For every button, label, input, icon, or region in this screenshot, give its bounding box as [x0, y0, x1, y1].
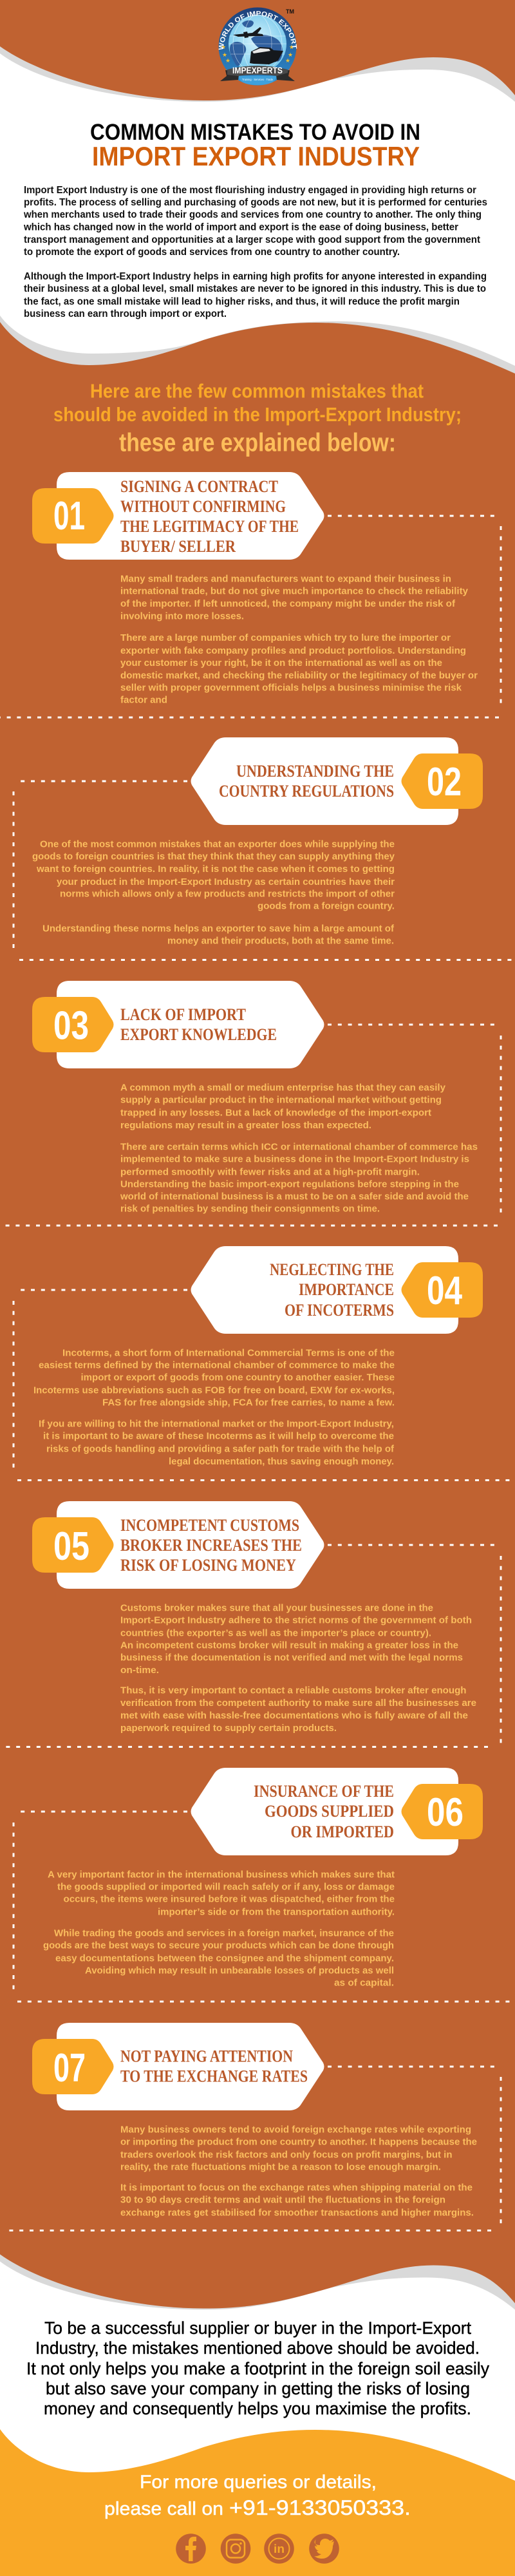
body 07: Many business owners tend to avoid foreign exchange rates while exporting: [120, 2124, 471, 2135]
closing statement: Industry, the mistakes mentioned above should be avoided.: [35, 2338, 480, 2358]
heading 07: TO THE EXCHANGE RATES: [120, 2067, 308, 2086]
icon: linkedin: in: [274, 2543, 285, 2555]
body 02: [32, 839, 395, 947]
body 02: goods from a foreign country.: [258, 901, 395, 912]
closing statement: It not only helps you make a footprint in the foreign soil easily: [26, 2359, 490, 2378]
body 06: as of capital.: [334, 1978, 394, 1989]
body 06: the goods supplied or imported will reach safely or if any, loss or damage: [57, 1882, 395, 1893]
body 07: exchange rates get stabilised for smoother transactions and higher margins.: [120, 2208, 474, 2218]
body 01: your customer is your right, be it on the international as well as on the: [120, 658, 442, 668]
body 03: regulations may result in a greater loss than expected.: [120, 1120, 371, 1131]
logo: World of Import Export: ★: [221, 44, 226, 50]
intro text: [23, 185, 487, 319]
tag shape 06: [191, 1768, 483, 1855]
body 06: A very important factor in the international business which makes sure that: [48, 1869, 395, 1880]
body 07: It is important to focus on the exchange rates when shipping material on the: [120, 2183, 473, 2193]
body 02: One of the most common mistakes that an exporter does while supplying the: [40, 839, 395, 850]
logo: World of Import Export: WORLD OF IMPORT EXPORT: [219, 11, 297, 50]
panel: mistake 03: [0, 981, 501, 1226]
heading 02: COUNTRY REGULATIONS: [219, 782, 394, 800]
body 01: involving into more losses.: [120, 611, 244, 622]
body 02: norms which allows only a few products and restricts the import of other: [60, 889, 395, 899]
body 07: traders overlook the risk factors and only focus on profit margins, but in: [120, 2149, 452, 2160]
intro text: their business at a global level, small mistakes are never to be ignored in this industry. This is due to: [24, 283, 486, 294]
heading 01: SIGNING A CONTRACT: [120, 477, 278, 496]
body 01: domestic market, and checking the reliability or the legitimacy of the buyer or: [120, 670, 478, 681]
intro text: profits. The process of selling and purchasing of goods are not new, but it is performed for centuries: [24, 197, 487, 208]
body 03: Understanding the basic import-export regulations before stepping in the: [120, 1179, 459, 1190]
body 06: occurs, the items were insured before it was dispatched, either from the: [63, 1894, 395, 1905]
logo: World of Import Export: TM: [286, 8, 294, 15]
icon: instagram: [221, 2533, 250, 2564]
number 06: 06: [427, 1790, 464, 1835]
body 04: Incoterms, a short form of International Commercial Terms is one of the: [62, 1347, 395, 1358]
tag shape 04: [191, 1246, 483, 1334]
number 01: 01: [53, 494, 85, 538]
panel: mistake 05: [0, 1501, 501, 1747]
number 07: 07: [53, 2046, 86, 2090]
body 03: risk of penalties by sending their consignments on time.: [120, 1203, 380, 1215]
body 05: Import-Export Industry adhere to the strict norms of the government of both: [120, 1615, 472, 1626]
section heading: should be avoided in the Import-Export Industry;: [53, 403, 462, 426]
icon: ship: [250, 47, 283, 64]
body 06: goods are the best ways to secure your products which can be done through: [43, 1940, 394, 1951]
contact text: please call on: [104, 2499, 223, 2519]
title: COMMON MISTAKES TO AVOID IN: [90, 120, 420, 145]
closing statement: but also save your company in getting the risks of losing: [46, 2379, 470, 2398]
logo: World of Import Export: IMPEXPERTS: [232, 66, 283, 75]
intro text: business can earn through import or export.: [24, 308, 227, 319]
main orange background with wave: [0, 316, 515, 2215]
intro text: Although the Import-Export Industry helps in earning high profits for anyone interested in expanding: [24, 271, 487, 282]
heading 06: GOODS SUPPLIED: [265, 1802, 394, 1821]
body 03: A common myth a small or medium enterprise has that they can easily: [120, 1083, 446, 1094]
body 05: met with ease with hassle-free documentations who is fully aware of all the: [120, 1710, 468, 1721]
tag shape 02: [191, 737, 483, 825]
heading 01: BUYER/ SELLER: [120, 537, 236, 556]
body 07: or importing the product from one country to another. It happens because the: [120, 2136, 477, 2147]
tag shape 07: [32, 2023, 324, 2110]
panel: mistake 01: [0, 472, 501, 717]
heading 02: [219, 762, 394, 800]
intro text: transport management and opportunities at a larger scope with good support from the government: [24, 234, 480, 245]
body 04: risks of goods handling and providing a safer path for trade with the help of: [46, 1444, 395, 1455]
body 01: international trade, but do not give much importance to check the reliability: [120, 586, 469, 597]
number 05: 05: [53, 1524, 89, 1569]
body 02: want to foreign countries. In reality, it is not the case when it comes to getting: [36, 864, 395, 875]
panel: mistake 07: [5, 2023, 501, 2231]
heading 06: OR IMPORTED: [291, 1823, 394, 1841]
intro text: which has changed now in the world of import and export is the ease of doing business, better: [23, 222, 458, 233]
tag shape 03: [32, 981, 324, 1068]
heading 03: [120, 1005, 277, 1044]
logo: World of Import Export: ★: [225, 57, 230, 64]
body 06: importer’s side or from the transportation authority.: [158, 1907, 395, 1918]
body 01: Many small traders and manufacturers want to expand their business in: [120, 573, 451, 585]
heading 02: UNDERSTANDING THE: [236, 762, 394, 781]
body 01: exporter with fake company profiles and product portfolios. Understanding: [120, 645, 466, 656]
body 04: legal documentation, thus saving enough money.: [169, 1456, 394, 1467]
number 03: 03: [53, 1003, 89, 1048]
body 05: paperwork required to supply certain products.: [120, 1723, 337, 1734]
heading 07: NOT PAYING ATTENTION: [120, 2047, 293, 2066]
panel: mistake 02: [14, 737, 515, 960]
body 05: Customs broker makes sure that all your businesses are done in the: [120, 1602, 433, 1613]
title: IMPORT EXPORT INDUSTRY: [92, 141, 420, 171]
body 04: easiest terms defined by the international chamber of commerce to make the: [39, 1360, 395, 1370]
body 04: import or export of goods from one country to another easier. These: [81, 1372, 395, 1383]
icon: airplane: [233, 27, 263, 38]
body 05: An incompetent customs broker will result in making a greater loss in the: [120, 1640, 458, 1651]
body 01: seller with proper government officials helps a business minimise the risk: [120, 683, 462, 694]
body 07: [120, 2124, 477, 2218]
body 07: reality, the rate fluctuations might be a reason to lose enough margin.: [120, 2162, 441, 2173]
contact text: +91-9133050333.: [229, 2496, 411, 2519]
body 02: goods to foreign countries is that they think that they can supply anything they: [32, 851, 395, 862]
body 04: If you are willing to hit the international market or the Import-Export Industry,: [39, 1419, 394, 1430]
body 03: performed smoothly with fewer risks and at a high-profit margin.: [120, 1167, 420, 1177]
heading 07: [120, 2047, 308, 2086]
heading 06: [254, 1782, 394, 1841]
body 06: easy documentations between the consignee and the shipment company.: [55, 1953, 394, 1964]
body 04: [33, 1347, 395, 1467]
contact text: [104, 2472, 411, 2519]
heading 05: [120, 1516, 302, 1575]
body 06: While trading the goods and services in a foreign market, insurance of the: [54, 1928, 394, 1939]
body 01: factor and: [120, 694, 167, 705]
heading 04: IMPORTANCE: [299, 1280, 394, 1299]
title: [90, 120, 420, 171]
body 05: on-time.: [120, 1665, 159, 1676]
body 02: your product in the Import-Export Industry as certain countries have their: [57, 876, 395, 887]
heading 05: RISK OF LOSING MONEY: [120, 1556, 296, 1575]
icon: linkedin: [264, 2533, 294, 2564]
closing statement: money and consequently helps you maximise the profits.: [44, 2399, 471, 2418]
section heading: Here are the few common mistakes that: [90, 380, 424, 402]
section heading: [53, 380, 462, 457]
heading 03: EXPORT KNOWLEDGE: [120, 1025, 277, 1044]
contact text: For more queries or details,: [140, 2472, 377, 2492]
heading 06: INSURANCE OF THE: [254, 1782, 394, 1801]
body 04: it is important to be aware of these Incoterms as it will help to overcome the: [43, 1430, 394, 1441]
body 02: money and their products, both at the same time.: [167, 936, 394, 947]
body 03: trapped in any losses. But a lack of knowledge of the import-export: [120, 1108, 431, 1119]
intro text: to promote the export of goods and services from one country to another country.: [24, 247, 400, 258]
logo: World of Import Export: ★: [288, 52, 293, 58]
top wave banner: [0, 0, 515, 102]
heading 05: BROKER INCREASES THE: [120, 1536, 302, 1555]
heading 04: NEGLECTING THE: [270, 1260, 394, 1279]
heading 03: LACK OF IMPORT: [120, 1005, 246, 1024]
closing wave over main section: [0, 2208, 515, 2309]
heading 04: OF INCOTERMS: [285, 1301, 394, 1320]
body 05: verification from the competent authority to make sure all the businesses are: [120, 1698, 476, 1709]
body 05: countries (the exporter’s as well as the importer’s place or country).: [120, 1628, 431, 1638]
body 03: implemented to make sure a business done in the Import-Export Industry is: [120, 1154, 469, 1165]
body 03: There are certain terms which ICC or international chamber of commerce has: [120, 1141, 478, 1153]
logo: World of Import Export: [219, 8, 297, 85]
body 01: There are a large number of companies which try to lure the importer or: [120, 632, 451, 643]
number 04: 04: [427, 1269, 462, 1313]
body 03: supply a particular product in the international market without getting: [120, 1095, 442, 1105]
heading 01: THE LEGITIMACY OF THE: [120, 517, 299, 536]
logo: World of Import Export: ★: [285, 57, 290, 64]
closing statement: To be a successful supplier or buyer in the Import-Export: [44, 2318, 472, 2338]
heading 04: [270, 1260, 394, 1320]
panel: mistake 06: [14, 1768, 515, 2002]
panel: mistake 04: [14, 1246, 515, 1480]
body 02: Understanding these norms helps an exporter to save him a large amount of: [42, 923, 395, 934]
heading 05: INCOMPETENT CUSTOMS: [120, 1516, 299, 1535]
heading 01: [120, 477, 299, 556]
body 01: [120, 573, 478, 705]
heading 01: WITHOUT CONFIRMING: [120, 497, 286, 516]
body 01: of the importer. If left unnoticed, the company might be under the risk of: [120, 598, 456, 609]
logo: World of Import Export: ★: [222, 52, 227, 58]
body 05: [120, 1602, 476, 1734]
section heading: these are explained below:: [119, 429, 396, 457]
logo: World of Import Export: ★: [289, 44, 294, 50]
body 04: FAS for free alongside ship, FCA for free carries, to name a few.: [102, 1397, 395, 1408]
body 03: world of international business is a must to be on a safer side and avoid the: [120, 1191, 469, 1202]
intro text: when merchants used to trade their goods and services from one country to another. The only thing: [23, 209, 482, 220]
body 03: [120, 1083, 478, 1215]
footer panel: [0, 2429, 515, 2576]
intro text: Import Export Industry is one of the most flourishing industry engaged in providing high returns or: [24, 185, 476, 196]
intro text: the fact, as one small mistake will lead to higher risks, and thus, it will reduce the profit margin: [24, 296, 460, 307]
body 06: Avoiding which may result in unbearable losses of products as well: [85, 1965, 394, 1976]
body 07: 30 to 90 days credit terms and wait until the fluctuations in the foreign: [120, 2195, 445, 2205]
tag shape 05: [32, 1501, 324, 1589]
icon: facebook: [176, 2533, 206, 2564]
closing statement: [26, 2318, 490, 2418]
body 05: business if the documentation is not verified and met with the legal norms: [120, 1653, 463, 1663]
tag shape 01: [32, 472, 324, 560]
icon: twitter: [309, 2533, 339, 2564]
logo: World of Import Export: Training · Services · Trade: [242, 78, 273, 81]
number 02: 02: [427, 760, 462, 804]
body 06: [43, 1869, 395, 1989]
body 05: Thus, it is very important to contact a reliable customs broker after enough: [120, 1685, 466, 1696]
body 04: Incoterms use abbreviations such as FOB for free on board, EXW for ex-works,: [33, 1385, 395, 1396]
